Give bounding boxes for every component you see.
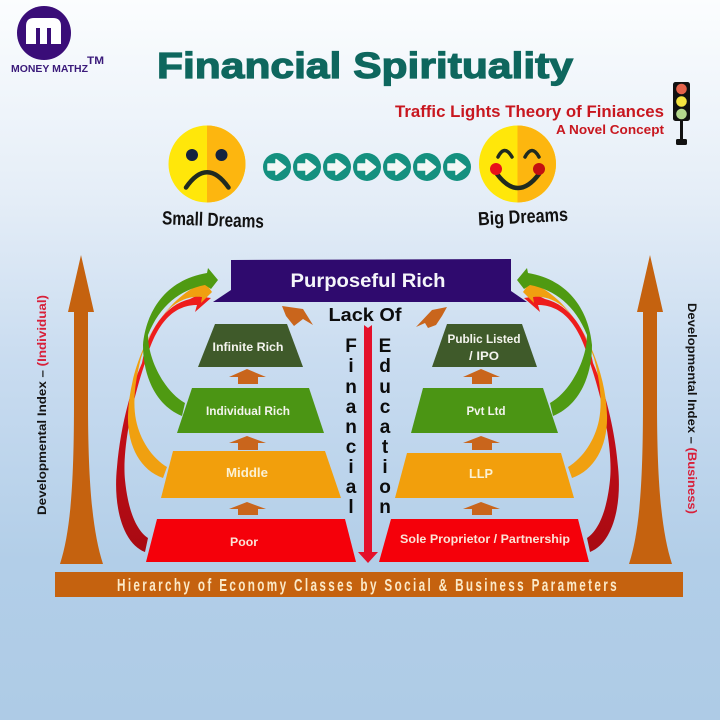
tier: sole proprietor / partnership: Sole Proprietor / Partnership [400,532,570,546]
tier: infinite rich [198,324,303,367]
label: financial: a [346,397,357,418]
label: big dreams: Big Dreams [478,205,569,230]
arrow: up [229,436,266,450]
banner: purposeful rich [213,259,527,302]
label: developmental index business: Developmental Index – (Business) [685,303,699,514]
label: education: n [379,497,391,518]
tier: poor: Poor [230,535,258,549]
banner: hierarchy of economy classes [55,572,683,597]
tier: middle: Middle [226,466,268,480]
label: financial [345,336,357,518]
label: education: d [379,356,391,377]
curved arrow: pvt ltd to purposeful rich [517,268,592,416]
label: financial: i [348,356,354,377]
subtitle: traffic lights theory [395,103,665,137]
icon: happy face [479,126,556,202]
tier: infinite rich: Infinite Rich [212,340,284,354]
tier: sole proprietor / partnership [379,519,589,562]
label: financial: n [345,377,357,398]
icon: progress arrows [263,153,471,181]
tier: pvt ltd [411,388,558,433]
label: education: u [379,377,391,398]
arrow: up [229,369,266,384]
label: financial: i [348,457,354,478]
curved arrow: llp to purposeful rich [523,282,607,478]
label: financial: c [346,437,357,458]
subtitle: traffic lights theory: Traffic Lights Theory of Finiances [395,103,664,121]
curved arrows: right [517,268,619,552]
label: education: o [379,477,391,498]
icon: sad face [168,126,246,202]
arrow: up [463,502,500,515]
label: financial: l [348,497,354,518]
arrow: diagonal right to banner [416,307,447,328]
label: education: c [380,397,391,418]
arrow: up [229,502,266,515]
icon: traffic light [673,82,690,145]
tier: middle [161,451,341,498]
label: education: a [380,417,391,438]
tier: pvt ltd: Pvt Ltd [466,404,506,418]
label: education: t [382,437,389,458]
tier: individual rich: Individual Rich [206,404,290,418]
label: financial: F [345,336,357,357]
tier: llp [395,453,574,498]
heading: lack of: Lack Of [328,305,403,325]
logo: Money Mathz: TM [87,55,104,67]
logo: Money Mathz [11,6,104,75]
label: financial: a [346,477,357,498]
tier: public listed / ipo: / IPO [469,349,499,363]
tier: individual rich [177,388,324,433]
curved arrow: middle to purposeful rich [128,282,212,478]
label: education: i [382,457,388,478]
curved arrow: individual rich to purposeful rich [143,268,218,416]
logo: Money Mathz: MONEY MATHZ [11,64,88,75]
arrow: left developmental index [60,255,103,564]
title: Financial Spirituality [157,45,573,86]
banner: purposeful rich: Purposeful Rich [290,271,446,292]
arrow: up [463,369,500,384]
label: developmental index individual: Developmental Index – (Individual) [35,295,49,515]
label: education: E [379,336,391,357]
curved arrow: poor to purposeful rich [116,296,211,552]
tier: poor [146,519,356,562]
label: small dreams: Small Dreams [162,208,264,233]
curved arrows: left [116,268,218,552]
arrow: up [463,436,500,450]
label: financial: n [345,417,357,438]
tier: public listed / ipo: Public Listed [448,332,520,346]
subtitle: traffic lights theory: A Novel Concept [556,122,665,137]
tier: public listed / ipo [432,324,537,367]
arrow: right developmental index [629,255,672,564]
arrow: diagonal left to banner [282,306,313,326]
label: education [379,336,391,518]
tier: llp: LLP [469,467,493,481]
curved arrow: sole proprietor to purposeful rich [524,296,619,552]
arrow: lack of financial education [358,325,378,563]
